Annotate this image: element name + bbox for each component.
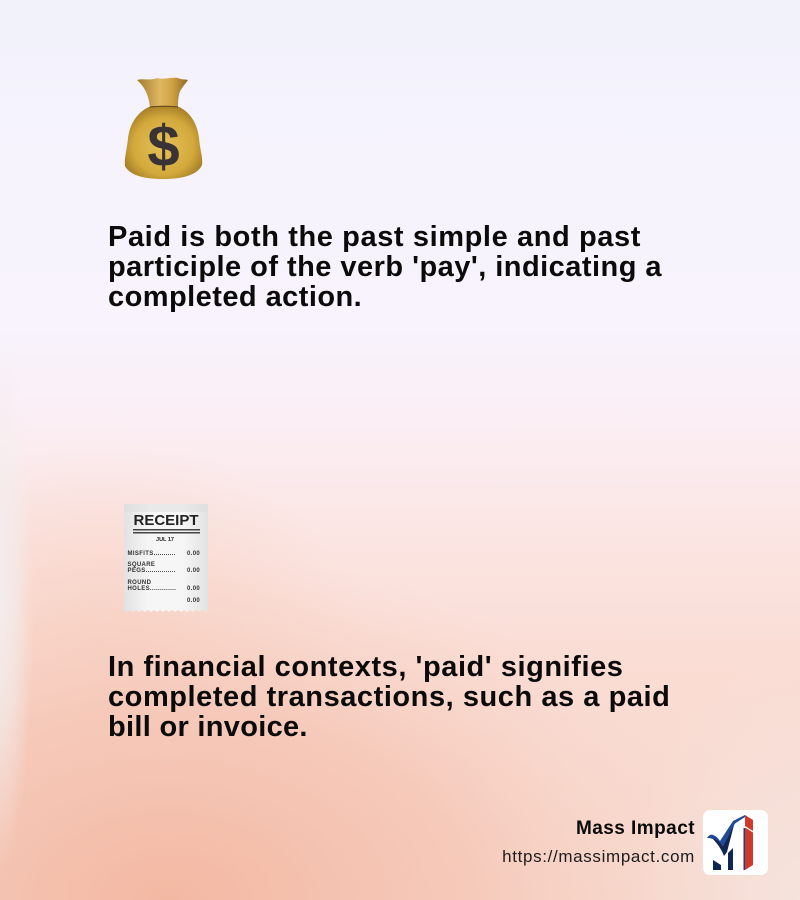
text block: past simple — [108, 221, 662, 313]
icon: money bag — [124, 78, 202, 179]
text block: financial contexts: completed transactions, such as a paid — [108, 681, 670, 713]
text block: financial contexts — [108, 651, 670, 743]
icon: receipt: SQUARE — [128, 562, 155, 568]
text block: past simple: completed action. — [108, 281, 362, 313]
icon: receipt: MISFITS........... — [128, 551, 176, 557]
icon: receipt: 0.00 — [187, 551, 200, 557]
icon: receipt: PEGS............... — [128, 568, 176, 574]
icon: money bag: $ — [147, 114, 180, 179]
icon: receipt: RECEIPT — [133, 512, 199, 529]
text block: past simple: participle of the verb 'pay', indicating a — [108, 251, 662, 283]
icon: receipt: JUL 17 — [156, 537, 174, 543]
icon: receipt: ROUND — [128, 580, 152, 586]
icon: receipt: 0.00 — [187, 598, 200, 604]
logo — [703, 810, 768, 875]
icon: receipt: 0.00 — [187, 568, 200, 574]
brand url: https://massimpact.com — [502, 847, 695, 866]
icon: receipt: 0.00 — [187, 586, 200, 592]
text block: financial contexts: bill or invoice. — [108, 711, 308, 743]
icon: receipt: HOLES............. — [128, 586, 176, 592]
text block: past simple: Paid is both the past simple and past — [108, 221, 641, 253]
icon: receipt — [124, 504, 208, 612]
brand name: Mass Impact — [576, 818, 695, 839]
text block: financial contexts: In financial contexts, 'paid' signifies — [108, 651, 623, 683]
